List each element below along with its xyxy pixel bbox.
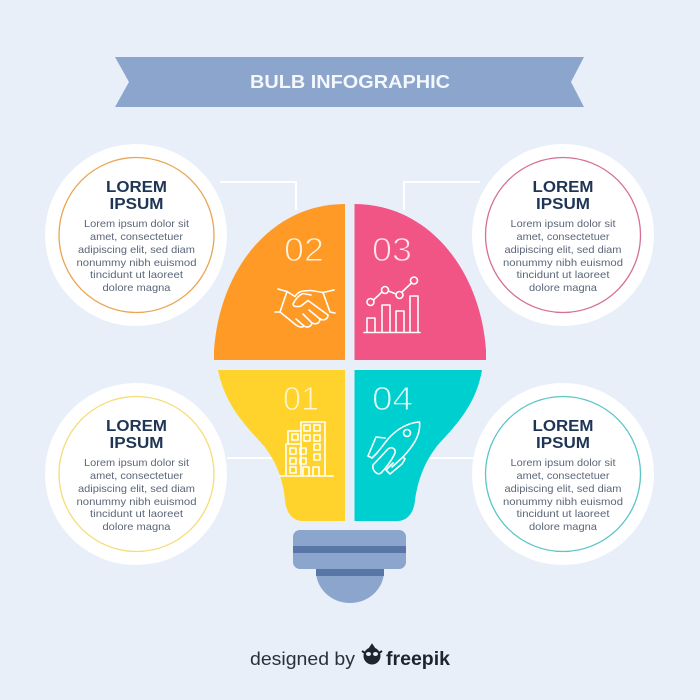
panel: yellow bulb segment 01: 01 — [283, 380, 319, 417]
panel: bottom right text circle: Lorem ipsum dolor sit — [510, 457, 616, 469]
panel: pink bulb segment 03 — [354, 204, 486, 360]
panel: yellow bulb segment 01 — [218, 370, 345, 521]
panel: top left text circle: Lorem ipsum dolor sit — [84, 218, 189, 230]
panel: top right text circle: adipiscing elit, sed diam — [504, 244, 622, 256]
credit: designed by freepik: freepik — [386, 649, 450, 670]
panel: top left text circle — [45, 144, 227, 326]
icon: growth chart — [364, 277, 420, 332]
panel: top left text circle: adipiscing elit, sed diam — [78, 244, 195, 256]
icon: freepik logo — [362, 645, 382, 664]
icon: office buildings — [280, 422, 333, 476]
panel: bottom right text circle: IPSUM — [536, 435, 590, 452]
panel: orange bulb segment 02: 02 — [284, 231, 324, 268]
panel: top left text circle: amet, consectetuer — [90, 231, 184, 243]
credit: designed by freepik: designed by — [250, 649, 355, 669]
panel: bottom left text circle: dolore magna — [102, 521, 171, 533]
panel: top right text circle: LOREM — [532, 179, 594, 196]
panel: teal bulb segment 04: 04 — [372, 380, 413, 417]
panel: top left text circle: dolore magna — [102, 282, 171, 294]
title banner — [115, 57, 584, 107]
title banner: BULB INFOGRAPHIC — [250, 72, 450, 92]
panel: bottom right text circle: dolore magna — [529, 521, 597, 533]
bulb base — [293, 530, 406, 603]
panel: bottom left text circle: LOREM — [106, 418, 167, 435]
panel: orange bulb segment 02 — [214, 204, 345, 360]
panel: bottom left text circle: amet, consectetuer — [90, 470, 184, 482]
panel: bottom right text circle: amet, consectetuer — [516, 470, 610, 482]
panel: bottom left text circle: Lorem ipsum dolor sit — [84, 457, 189, 469]
panel: top right text circle: nonummy nibh euismod — [503, 257, 623, 269]
panel: top right text circle: Lorem ipsum dolor sit — [510, 218, 616, 230]
panel: top right text circle — [472, 144, 654, 326]
panel: pink bulb segment 03: 03 — [372, 231, 412, 268]
panel: top left text circle: IPSUM — [110, 196, 164, 213]
panel: bottom left text circle — [45, 383, 227, 565]
panel: teal bulb segment 04 — [354, 370, 482, 521]
panel: top right text circle: amet, consectetuer — [516, 231, 610, 243]
panel: bottom right text circle: nonummy nibh euismod — [503, 496, 623, 508]
panel: bottom left text circle: tincidunt ut laoreet — [90, 508, 183, 520]
panel: top left text circle: LOREM — [106, 179, 167, 196]
panel: top left text circle: tincidunt ut laoreet — [90, 269, 183, 281]
panel: top right text circle: IPSUM — [536, 196, 590, 213]
panel: bottom left text circle: IPSUM — [110, 435, 164, 452]
icon: rocket — [368, 422, 420, 474]
panel: bottom right text circle — [472, 383, 654, 565]
panel: top left text circle: nonummy nibh euismod — [76, 257, 197, 269]
icon: handshake — [275, 289, 335, 327]
panel: bottom left text circle: adipiscing elit, sed diam — [78, 483, 195, 495]
panel: bottom left text circle: nonummy nibh euismod — [76, 496, 197, 508]
panel: top right text circle: dolore magna — [529, 282, 597, 294]
credit: designed by freepik — [250, 645, 450, 670]
panel: bottom right text circle: adipiscing elit, sed diam — [504, 483, 622, 495]
panel: bottom right text circle: LOREM — [532, 418, 594, 435]
panel: top right text circle: tincidunt ut laoreet — [516, 269, 610, 281]
panel: bottom right text circle: tincidunt ut laoreet — [516, 508, 610, 520]
